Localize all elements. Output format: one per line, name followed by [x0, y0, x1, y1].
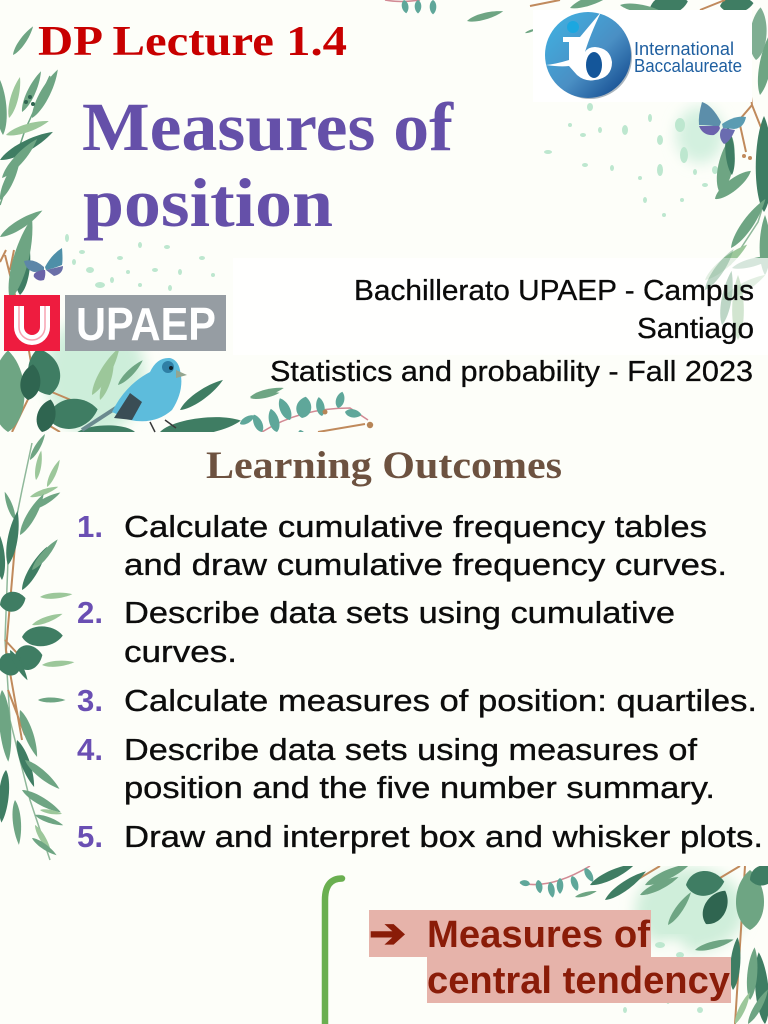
watercolor splatter: upper slide — [45, 103, 724, 435]
foliage: middle-left garland — [0, 433, 75, 860]
list item 4: 4. — [77, 732, 103, 767]
logo: International Baccalaureate — [533, 10, 752, 102]
callout: measures of central tendency — [369, 910, 731, 1003]
list item 3: 3. — [77, 683, 103, 718]
logo: International Baccalaureate: Baccalaureate — [634, 56, 742, 76]
foliage: top-left branch — [0, 25, 62, 241]
list item 4 — [77, 732, 715, 805]
list item 1: and draw cumulative frequency curves. — [124, 547, 727, 582]
list item 5: 5. — [77, 819, 103, 854]
butterfly: right — [699, 102, 746, 144]
white panel behind course details — [233, 258, 768, 355]
title: Measures of — [82, 89, 454, 165]
foliage: bottom-right corner — [519, 860, 768, 1024]
subtitle leaves seen through the panel — [701, 246, 744, 340]
title: position — [83, 165, 333, 241]
lecture label: DP Lecture 1.4 — [38, 19, 347, 65]
foliage: lower-left cluster — [0, 216, 280, 440]
logo: UPAEP: UPAEP — [76, 298, 216, 350]
list item 1: 1. — [77, 509, 103, 544]
list item 2 — [77, 595, 675, 669]
logo: UPAEP — [4, 295, 226, 351]
sprig: eucalyptus bottom centre of upper slide — [240, 388, 374, 432]
bird — [82, 358, 187, 432]
list item 1 — [77, 509, 727, 582]
logo: International Baccalaureate: International — [634, 39, 734, 59]
course details: Statistics and probability - Fall 2023 — [270, 356, 753, 388]
green bracket — [325, 878, 342, 1024]
course details: Bachillerato UPAEP - Campus — [354, 275, 754, 307]
list item 2: 2. — [77, 595, 103, 630]
callout: measures of central tendency: ➔ — [369, 911, 406, 957]
callout: measures of central tendency: central tendency — [427, 960, 730, 1002]
list item 3: Calculate measures of position: quartiles. — [124, 683, 757, 718]
list item 5: Draw and interpret box and whisker plots. — [124, 819, 763, 854]
learning outcomes heading: Learning Outcomes — [206, 444, 562, 487]
course details: Santiago — [637, 313, 754, 345]
list item 4: Describe data sets using measures of — [124, 732, 697, 767]
foliage: right side branch — [705, 97, 768, 300]
foliage: top sprig and top-right foliage — [385, 0, 768, 96]
list item 2: Describe data sets using cumulative — [124, 595, 675, 630]
list item 2: curves. — [124, 634, 237, 669]
list item 1: Calculate cumulative frequency tables — [124, 509, 707, 544]
title — [82, 89, 454, 241]
course details — [270, 275, 754, 388]
list item 4: position and the five number summary. — [124, 770, 715, 805]
callout: measures of central tendency: Measures of — [427, 914, 650, 956]
butterfly: left — [24, 248, 63, 281]
